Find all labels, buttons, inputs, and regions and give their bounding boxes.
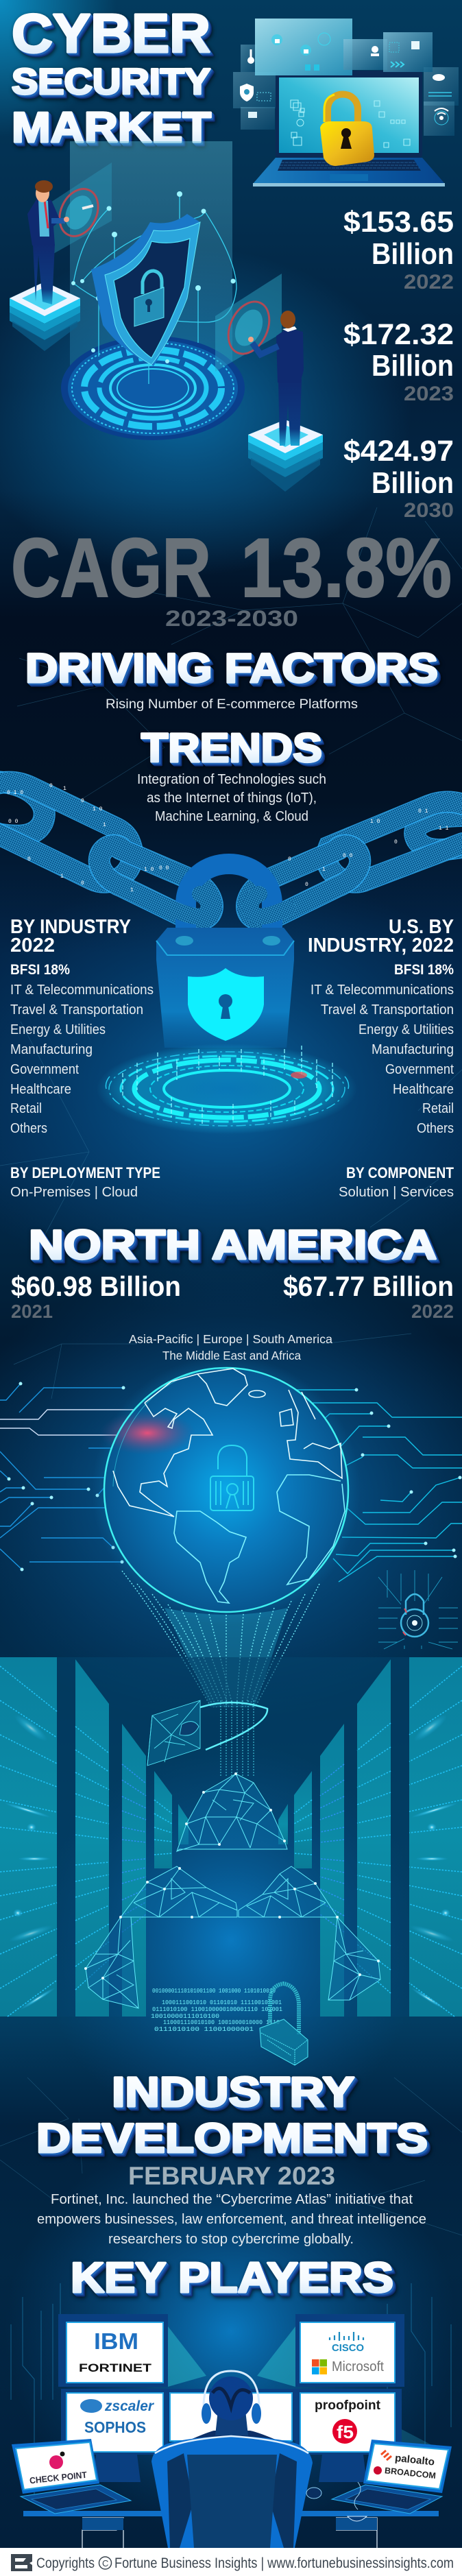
binary digits on chains: 0 — [49, 783, 53, 789]
stat: North America 2022: $67.77 Billion — [283, 1271, 454, 1302]
logo: F5 — [332, 2419, 357, 2444]
binary digits on chains: 0 — [394, 839, 398, 845]
right shoulder — [239, 1866, 337, 1917]
segment list: by industry 2022: BY INDUSTRY — [10, 916, 131, 938]
left chain links — [0, 782, 212, 920]
icon: Fortune Business Insights logo — [11, 2554, 32, 2571]
segment: by deployment type: BY DEPLOYMENT TYPE — [10, 1164, 160, 1181]
stat: 2022 market size: 2022 — [404, 271, 454, 293]
left arm — [86, 1917, 138, 2008]
segment list: U.S. by industry 2022: Others — [417, 1121, 454, 1136]
logo: Check Point: CHECK POINT — [29, 2470, 88, 2485]
logo: Zscaler — [80, 2398, 155, 2414]
stat: North America 2022: 2022 — [411, 1301, 454, 1322]
segment list: U.S. by industry 2022: BFSI 18% — [394, 962, 454, 978]
illustration: low-poly padlock at top of hacker scene — [147, 1700, 267, 1776]
hood — [177, 1774, 287, 1851]
chair — [151, 2436, 313, 2548]
segment list: by industry 2022: Travel & Transportation — [10, 1002, 143, 1018]
laptop screen — [276, 71, 422, 158]
illustration: binary code stream: 0111010100 1100100000100001110 101001 — [152, 2006, 282, 2013]
lock on globe — [210, 1445, 254, 1510]
segment list: by industry 2022: Healthcare — [10, 1082, 71, 1097]
binary digits on chains: 0 — [81, 798, 84, 804]
back wall and central glow — [0, 1657, 462, 2017]
illustration: low-poly hacker silhouette — [84, 1772, 380, 2008]
binary digits on chains: 0 1 — [418, 808, 428, 815]
stat: CAGR: 2023-2030 — [165, 606, 298, 631]
binary digits on chains: 1 — [130, 887, 134, 893]
icon: circuit padlock, lower right — [378, 1570, 458, 1649]
logo: Fortinet: FORTINET — [79, 2361, 152, 2374]
illustration: server room — [0, 1657, 462, 2139]
stat: CAGR — [11, 521, 452, 631]
light flares on racks — [3, 1711, 459, 2011]
title: Cyber Security Market — [12, 3, 211, 152]
segment: by component: Solution | Services — [339, 1185, 454, 1200]
panels floating left of laptop — [233, 45, 277, 130]
text: development description: researchers to stop cybercrime globally. — [108, 2231, 354, 2247]
stat: 2023 market size: Billion — [372, 349, 454, 383]
segment list: U.S. by industry 2022: Energy & Utilities — [358, 1022, 454, 1037]
heading: Trends: TRENDS — [141, 725, 322, 771]
stat: 2023 market size: 2023 — [404, 383, 454, 405]
figure: man from behind — [221, 295, 323, 492]
padlock body — [156, 928, 294, 1048]
text: development description: empowers businesses, law enforcement, and threat intelligence — [37, 2211, 426, 2227]
segment list: by industry 2022: Retail — [10, 1101, 42, 1116]
binary digits on chains: 0 — [305, 882, 308, 888]
monitor frames — [58, 2314, 404, 2455]
binary digits on chains: 0 — [288, 856, 291, 863]
binary digits on chains — [7, 783, 449, 911]
stat: 2030 market size: $424.97 — [343, 435, 454, 468]
logo: Zscaler: zscaler — [104, 2398, 155, 2414]
text: other regions: Asia-Pacific | Europe | South America — [129, 1332, 332, 1346]
stat: 2023 market size — [343, 318, 454, 405]
segment list: U.S. by industry 2022: U.S. BY — [389, 916, 454, 938]
logo: Palo Alto — [381, 2451, 435, 2468]
right laptop — [332, 2440, 452, 2514]
light streaks on racks — [0, 1666, 462, 2017]
server racks left — [0, 1657, 189, 2017]
text: trend description — [137, 772, 326, 824]
logo: Palo Alto: paloalto — [394, 2453, 435, 2468]
segment list: by industry 2022 — [10, 916, 154, 1136]
segment list: U.S. by industry 2022 — [308, 916, 454, 1136]
laptop base — [253, 158, 445, 184]
heading: Industry Developments: INDUSTRY — [112, 2069, 354, 2115]
binary digits on chains: 0 1 0 — [175, 904, 191, 911]
heading: Driving Factors: DRIVING FACTORS — [25, 645, 438, 691]
segment list: by industry 2022: 2022 — [10, 935, 55, 956]
illustration: key players workstation — [11, 2283, 452, 2548]
binary digits on chains: 0 1 0 — [7, 790, 23, 796]
segment list: U.S. by industry 2022: IT & Telecommunications — [311, 983, 454, 998]
segment list: U.S. by industry 2022: Retail — [422, 1101, 454, 1116]
monitor screens — [66, 2322, 395, 2452]
binary digits on chains: 1 — [103, 822, 106, 828]
logo: Sophos: SOPHOS — [84, 2418, 146, 2436]
segment list: U.S. by industry 2022: Manufacturing — [372, 1042, 454, 1057]
segment list: by industry 2022: Manufacturing — [10, 1042, 93, 1057]
large top panel — [255, 19, 352, 75]
segment list: U.S. by industry 2022: Government — [385, 1062, 454, 1077]
left shoulder — [121, 1866, 237, 1917]
segment list: by industry 2022: IT & Telecommunications — [10, 983, 154, 998]
illustration: binary funnel below the globe — [122, 1571, 319, 1707]
orbit lines with nodes — [71, 191, 236, 384]
continents — [113, 1369, 345, 1603]
background circuit lines — [11, 2283, 451, 2496]
icon: mesh padlock below hacker — [260, 1984, 308, 2065]
text: other regions — [129, 1332, 332, 1362]
right arm — [328, 1917, 380, 2000]
text: development description — [37, 2191, 426, 2247]
text: other regions: The Middle East and Africa — [162, 1349, 301, 1362]
text: trend description: Machine Learning, & Cloud — [155, 809, 308, 824]
stat: 2030 market size: Billion — [372, 466, 454, 500]
illustration: glowing rings below padlock — [97, 1044, 357, 1134]
illustration: binary code stream — [151, 1987, 282, 2033]
mouse and coffee cup — [306, 2482, 367, 2521]
segment: by deployment type — [10, 1164, 160, 1200]
stat: 2022 market size — [343, 206, 454, 293]
stat: North America 2021: $60.98 Billion — [11, 1271, 181, 1302]
shield icon on padlock — [188, 968, 264, 1041]
logo: Check Point — [29, 2452, 88, 2485]
concentric base circle — [61, 336, 245, 440]
stat: 2022 market size: $153.65 — [343, 206, 454, 239]
illustration: binary code stream: 10010000111010100 — [151, 2012, 219, 2020]
segment list: U.S. by industry 2022: Travel & Transportation — [321, 1002, 454, 1018]
text: development description: Fortinet, Inc. launched the “Cybercrime Atlas” initiative that — [51, 2191, 413, 2207]
segment list: by industry 2022: Government — [10, 1062, 79, 1077]
segment: by component — [339, 1164, 454, 1200]
binary digits on chains: 0 — [27, 856, 31, 863]
binary digits on chains: 0 — [271, 887, 274, 893]
binary digits on chains: 0 0 — [8, 819, 19, 825]
heading: North America: NORTH AMERICA — [29, 1222, 437, 1268]
segment list: by industry 2022: Others — [10, 1121, 47, 1136]
binary digits on chains: 1 1 — [439, 826, 449, 832]
heading: Key Players: KEY PLAYERS — [71, 2254, 393, 2302]
segment list: by industry 2022: BFSI 18% — [10, 962, 70, 978]
right chain links — [247, 802, 462, 920]
illustration: isometric shield scene with two figures — [10, 141, 323, 492]
stat: 2023 market size: $172.32 — [343, 318, 454, 351]
heading: Industry Developments — [36, 2069, 428, 2161]
binary digits on chains: 0 0 — [343, 853, 353, 859]
illustration: binary code stream: 0111010100 11001000001 — [154, 2025, 254, 2033]
binary digits on chains: 1 — [322, 867, 326, 873]
title: Cyber Security Market: CYBER — [12, 3, 210, 64]
person with headset — [180, 2371, 287, 2444]
logo: Microsoft — [312, 2359, 384, 2374]
binary digits on chains: 0 0 — [159, 865, 169, 871]
monitor stands — [93, 2455, 367, 2482]
illustration: binary code stream: 00100001110101001100 1001000 1101010010 — [152, 1987, 276, 1995]
text: trend description: as the Internet of things (IoT), — [147, 791, 317, 806]
footer: copyright bar — [0, 2548, 462, 2576]
padlock shackle — [186, 864, 272, 953]
stat: 2030 market size — [343, 435, 454, 522]
binary digits on chains: 1 0 — [144, 867, 154, 873]
segment list: U.S. by industry 2022: Healthcare — [393, 1082, 454, 1097]
right tilted hologram panel — [215, 274, 282, 372]
illustration: circuit lines around the globe — [0, 1382, 462, 1582]
desk — [23, 2511, 439, 2548]
logo: F5: f5 — [337, 2422, 354, 2442]
logo: Cisco — [330, 2332, 364, 2354]
binary digits on chains: 1 0 — [370, 819, 380, 825]
stat: 2030 market size: 2030 — [404, 499, 454, 522]
logo: IBM: IBM — [94, 2328, 138, 2354]
text: copyright line: C — [102, 2558, 108, 2568]
illustration: globe — [92, 1356, 361, 1624]
text: driving factor: Rising Number of E-commerce Platforms — [106, 697, 358, 712]
binary digits on chains: 1 0 — [93, 806, 103, 812]
stat: 2022 market size: Billion — [372, 237, 454, 271]
title: Cyber Security Market: MARKET — [12, 104, 211, 152]
logo: Cisco: CISCO — [332, 2342, 364, 2354]
date: February 2023: FEBRUARY 2023 — [128, 2162, 335, 2190]
logo: Microsoft: Microsoft — [332, 2359, 384, 2374]
illustration: binary code stream: 1000111001010 01101010 111100101001 — [162, 1999, 282, 2006]
figure: man with tie — [10, 180, 106, 351]
small top-right panels — [343, 39, 387, 70]
logo: Proofpoint: proofpoint — [315, 2398, 381, 2413]
binary digits on chains: 0 — [81, 880, 84, 887]
chain ends over shackle — [171, 894, 288, 917]
title: Cyber Security Market: SECURITY — [12, 62, 210, 102]
binary digits on chains: 1 — [60, 874, 64, 880]
segment: by deployment type: On-Premises | Cloud — [10, 1185, 138, 1200]
heading: Industry Developments: DEVELOPMENTS — [36, 2115, 428, 2161]
illustration: central padlock with shield — [156, 864, 294, 1048]
segment list: U.S. by industry 2022: INDUSTRY, 2022 — [308, 935, 454, 956]
keyboard — [278, 160, 421, 171]
segment list: by industry 2022: Energy & Utilities — [10, 1022, 106, 1037]
illustration: binary code stream: 110001110010100 1001000010000 1110 — [163, 2019, 280, 2026]
left laptop — [12, 2439, 131, 2514]
stat: North America 2021 — [11, 1271, 181, 1322]
tall translucent panel — [70, 141, 232, 368]
stat: CAGR: CAGR — [11, 521, 211, 614]
logo: Broadcom: BROADCOM — [384, 2466, 437, 2481]
shield — [91, 214, 200, 366]
stat: North America 2021: 2021 — [11, 1301, 53, 1322]
panels floating right of laptop — [424, 67, 459, 136]
padlock — [320, 95, 374, 166]
illustration: laptop with padlock and floating panels — [233, 19, 459, 186]
light beams — [168, 2326, 295, 2387]
text: copyright line: Copyrights — [36, 2555, 95, 2571]
text: trend description: Integration of Technologies such — [137, 772, 326, 787]
server racks right — [278, 1657, 462, 2017]
illustration: chains — [0, 782, 462, 920]
stat: North America 2022 — [283, 1271, 454, 1322]
left tilted hologram panel — [49, 162, 112, 256]
binary digits on chains: 1 — [63, 786, 66, 792]
